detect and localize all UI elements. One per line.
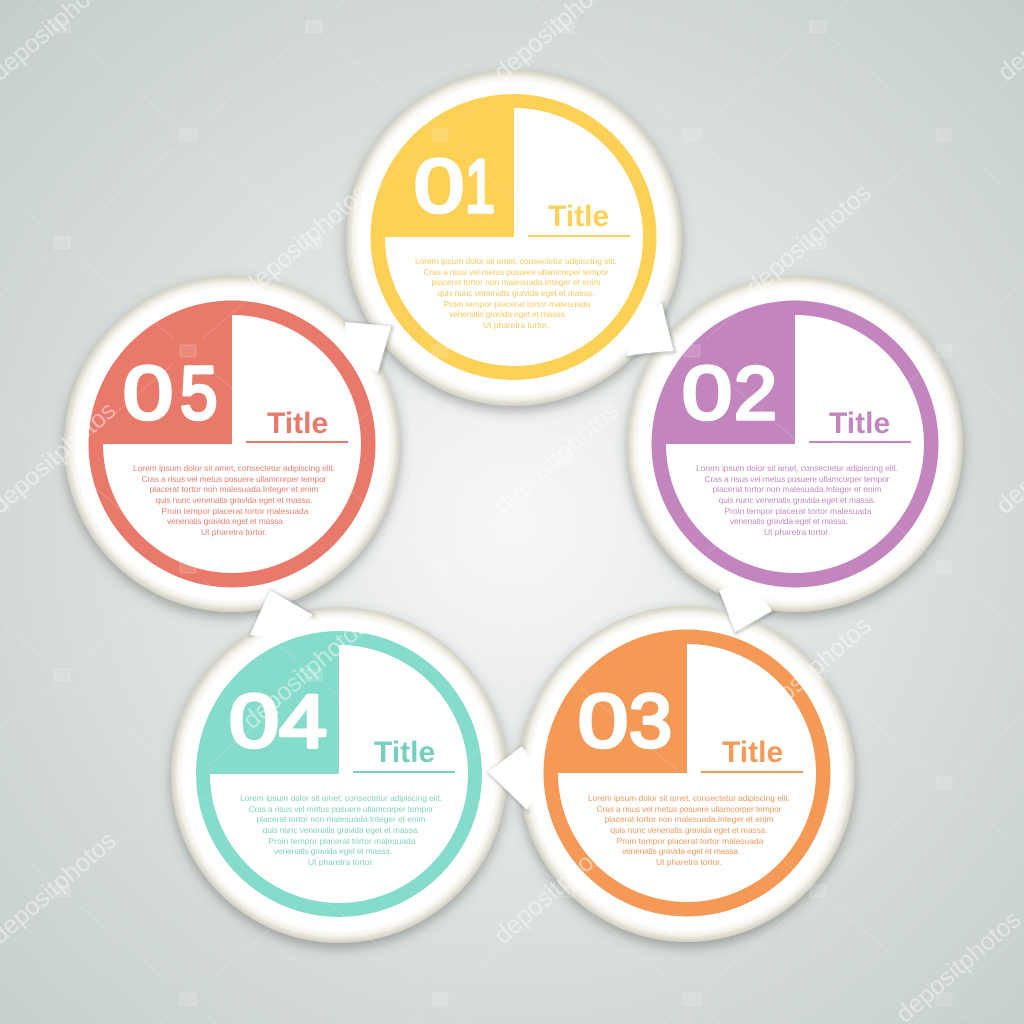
heading: Title [829,407,890,440]
callout tail: step 02 [719,583,772,632]
disc: step 04 [171,607,507,943]
heading underline [528,235,630,237]
number: 2 [734,352,777,436]
coloured ring and quadrant [544,630,830,916]
watermark text: depositphotos [238,611,373,735]
body text: Lorem ipsum dolor sit amet, consectetur adipiscing elit. [415,256,617,266]
disc: step 01 [346,70,682,406]
body text: Cras a risus vel metus posuere ullamcorper tempor [424,267,609,277]
body text: Ut pharetra tortor. [483,320,549,330]
heading: Title [374,736,435,769]
body text: quis nunc venenatis gravida eget et massa. [610,825,768,835]
body text: placerat tortor non malesuada.Integer et enim [604,814,774,824]
heading: Title [548,200,609,233]
heading underline [353,771,455,773]
number [229,679,327,764]
body text: Ut pharetra tortor. [656,857,722,867]
body text [696,463,898,537]
body text: Cras a risus vel metus posuere ullamcorper tempor [142,474,327,484]
heading: Title [722,736,783,769]
coloured ring and quadrant [370,94,656,380]
body text: placerat tortor non malesuada.Integer et enim [432,277,600,287]
number: 4 [279,680,327,764]
callout tail: step 01 [627,303,674,356]
disc: step 05 [64,276,400,612]
number: 5 [180,352,218,436]
body text: placerat tortor non malesuada.Integer et enim [256,814,426,824]
body text: quis nunc venenatis gravida eget et massa. [438,288,594,298]
callout tail: step 05 [345,322,391,372]
number: 0 [123,351,173,435]
body text: venenatis gravida eget et massa. [622,846,740,856]
disc: step 03 [519,606,855,942]
body text: Cras a risus vel metus posuere ullamcorper tempor [248,804,434,814]
body text: Proin tempor placerat tortor malesuada [724,506,872,516]
panel: step 02 [627,276,963,612]
number [682,351,777,436]
body text: venenatis gravida eget et massa. [274,846,392,856]
number: 0 [578,679,628,763]
heading underline [809,441,911,443]
body text: venenatis gravida eget et massa. [449,309,567,319]
body text: Cras a risus vel metus posuere ullamcorper tempor [704,474,890,484]
body text: Proin tempor placerat tortor malesuada [616,836,764,846]
body text: venenatis gravida eget et massa. [730,516,848,526]
watermark text: depositphotos [489,826,624,950]
panel: step 05 [64,276,400,612]
heading: Title [267,407,328,440]
body text: Cras a risus vel metus posuere ullamcorper tempor [596,804,782,814]
coloured ring and quadrant [652,300,938,588]
body text [415,256,617,330]
number: 1 [465,144,495,228]
number: 3 [629,680,672,764]
body text [133,463,335,537]
body text: Lorem ipsum dolor sit amet, consectetur adipiscing elit. [133,463,335,473]
body text: Ut pharetra tortor. [764,527,830,537]
number [578,679,672,764]
heading underline [701,771,803,773]
panel: step 01 [346,69,682,405]
heading underline [246,441,348,443]
body text: Ut pharetra tortor. [308,857,374,867]
panel: step 04 [171,606,507,942]
body text: quis nunc venenatis gravida eget et massa. [156,495,312,505]
body text: Proin tempor placerat tortor malesuada [444,299,591,309]
panel: step 03 [519,605,855,941]
number [414,144,495,228]
body text [588,793,790,867]
callout tail: step 04 [250,590,313,638]
body text: placerat tortor non malesuada.Integer et enim [712,484,882,494]
body text: placerat tortor non malesuada.Integer et enim [150,484,318,494]
watermark text: depositphotos [741,611,876,735]
body text: Lorem ipsum dolor sit amet, consectetur adipiscing elit. [240,793,442,803]
body text: Proin tempor placerat tortor malesuada [268,836,416,846]
body text: Lorem ipsum dolor sit amet, consectetur adipiscing elit. [588,793,790,803]
body text: quis nunc venenatis gravida eget et massa. [262,825,420,835]
watermark text: depositphotos [238,178,373,302]
number: 0 [229,679,279,763]
coloured ring and quadrant [88,300,376,588]
body text [240,793,442,867]
number: 0 [682,351,732,435]
body text: Proin tempor placerat tortor malesuada [162,506,309,516]
body text: quis nunc venenatis gravida eget et massa. [718,495,876,505]
number: 0 [414,144,464,228]
callout tail: step 03 [488,746,541,810]
body text: Ut pharetra tortor. [201,527,267,537]
body text: Lorem ipsum dolor sit amet, consectetur adipiscing elit. [696,463,898,473]
watermark text: depositphotos [489,396,624,520]
number [123,351,218,436]
watermark text: depositphotos [741,178,876,302]
body text: venenatis gravida eget et massa. [167,516,285,526]
coloured ring and quadrant [196,631,482,917]
disc: step 02 [627,276,963,612]
